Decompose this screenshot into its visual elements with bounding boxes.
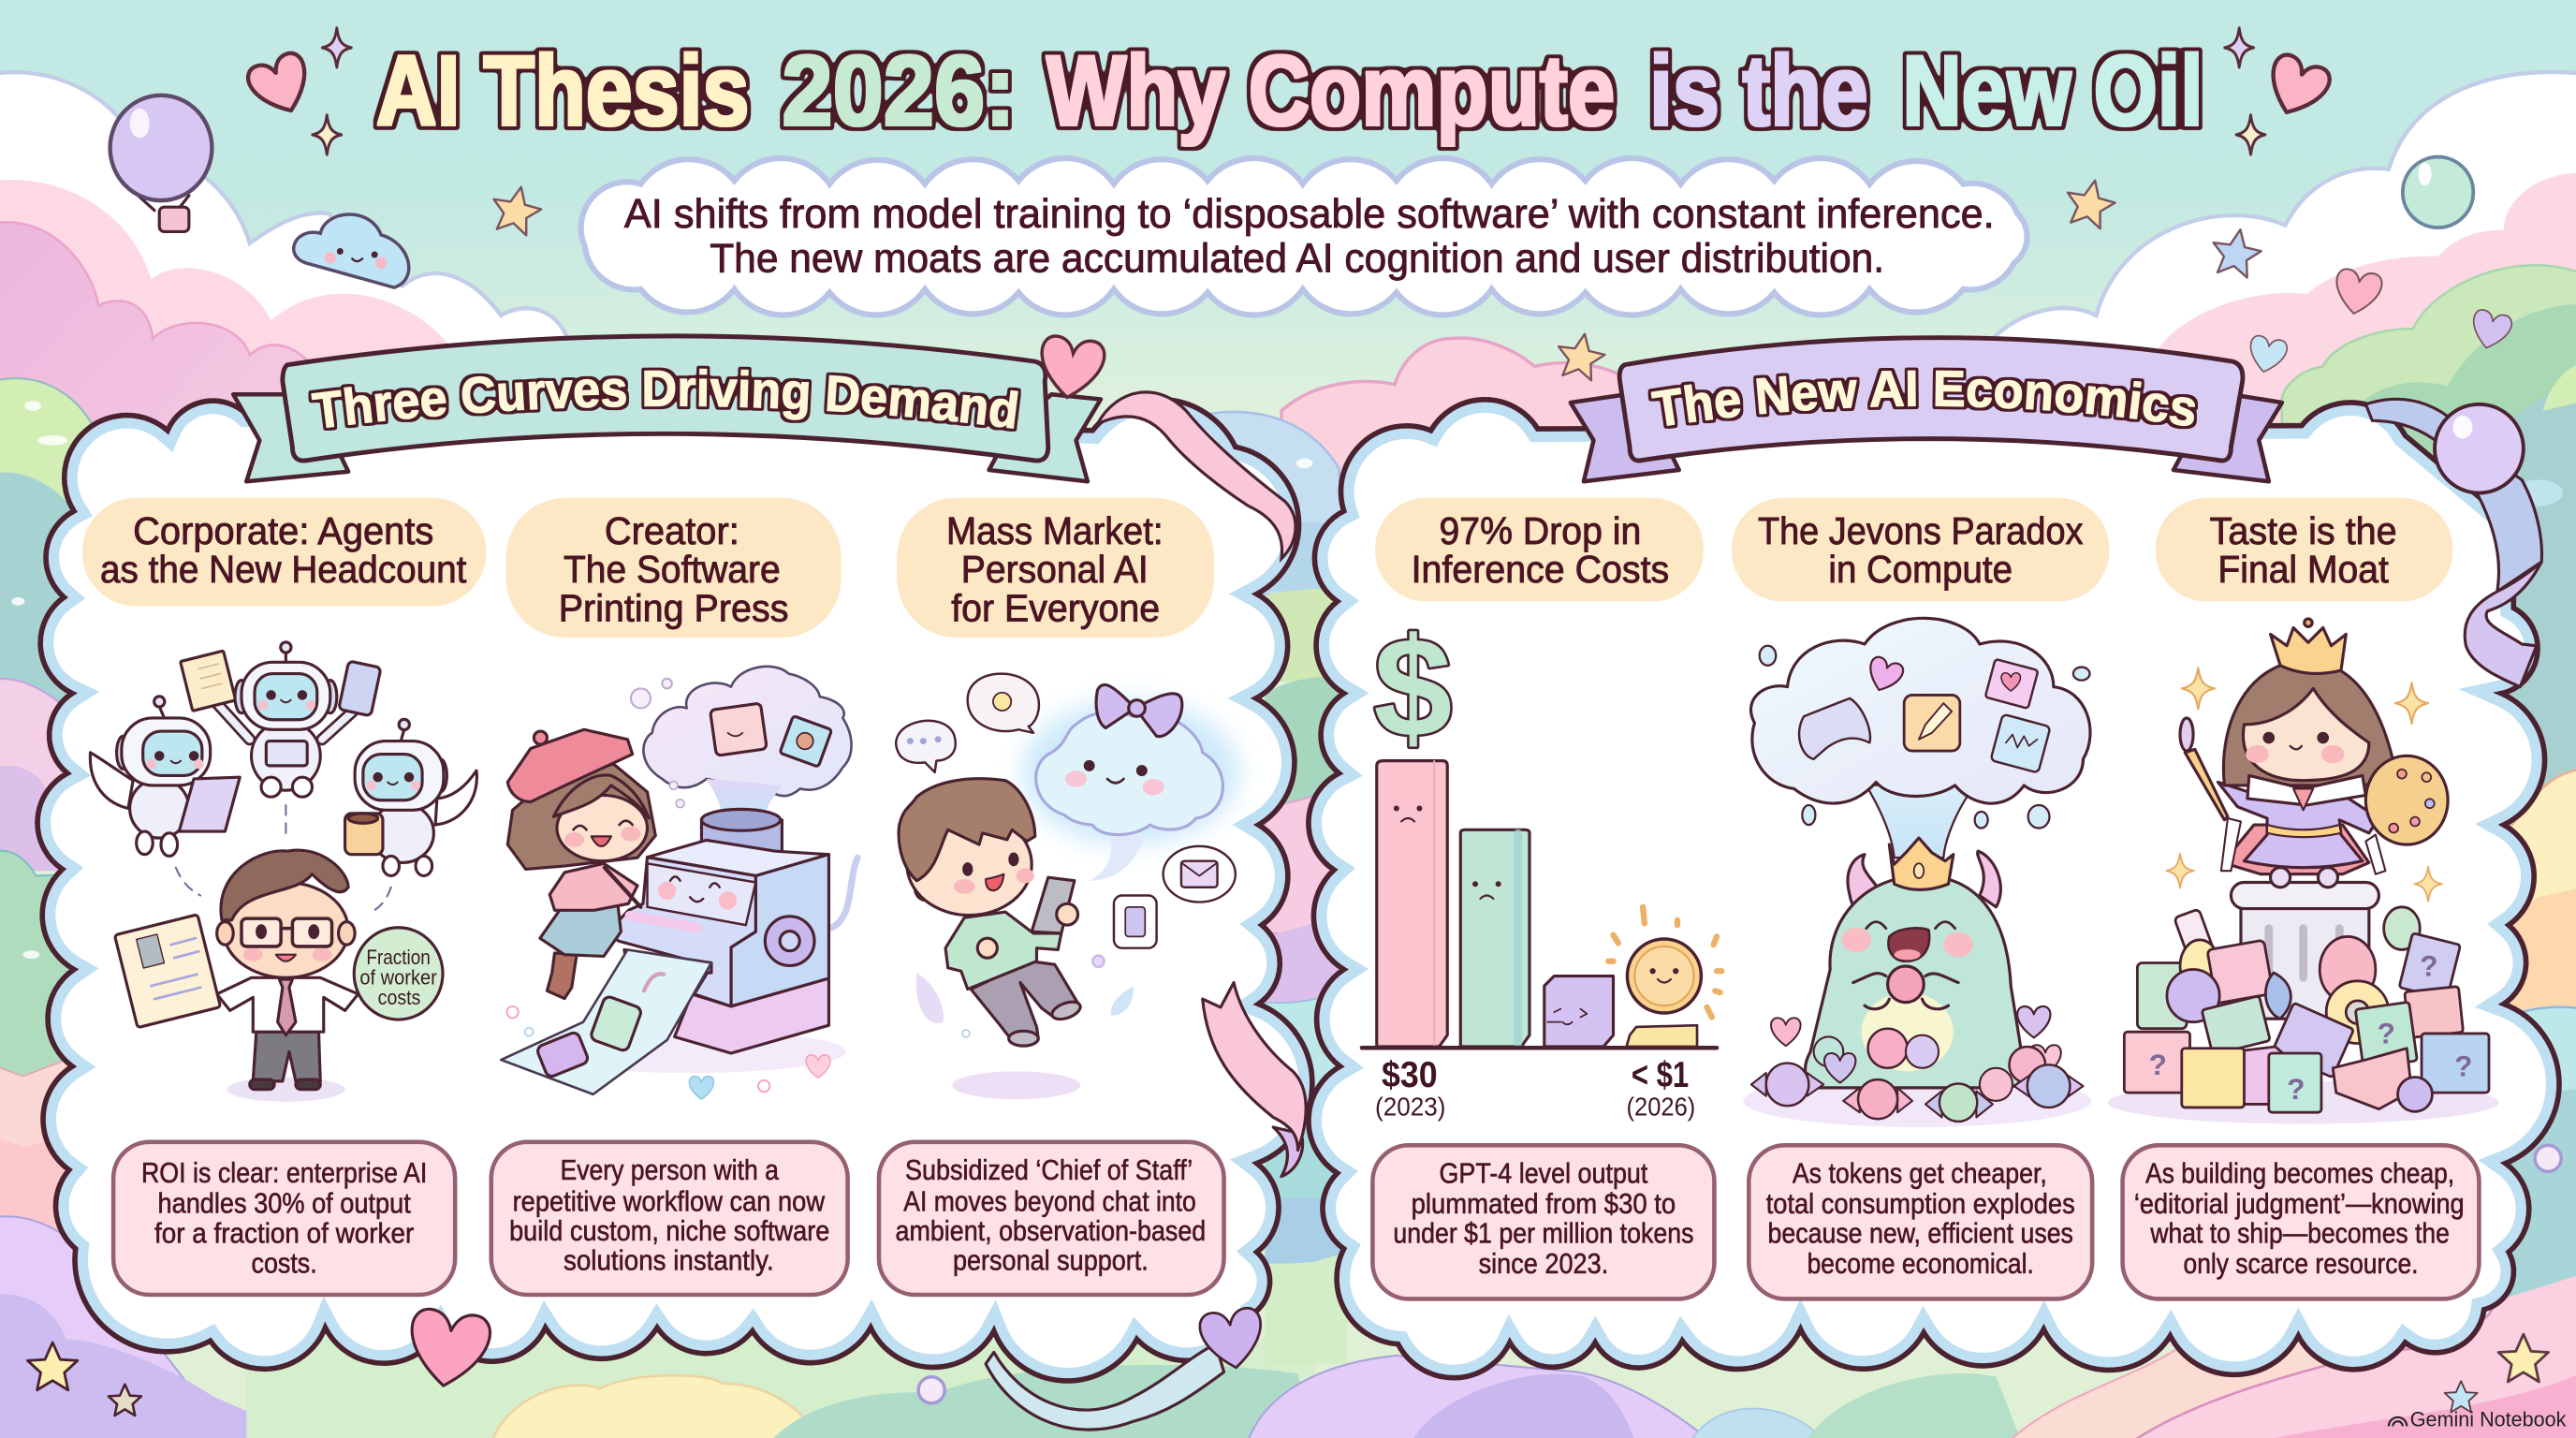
cape xyxy=(2223,825,2369,874)
bar: middle xyxy=(1460,829,1530,1047)
text box: Subsidized: AI moves beyond chat into xyxy=(903,1185,1196,1218)
pill: 97% Drop: 97% Drop in xyxy=(1439,509,1641,552)
illustration: princess on pedestal with blocks xyxy=(2108,619,2499,1123)
text box: tokens xyxy=(1749,1145,2092,1299)
pill bodies: left panel descriptions xyxy=(113,1142,1224,1295)
question marks: ? xyxy=(2287,1072,2305,1106)
text box: Subsidized: personal support. xyxy=(953,1244,1149,1277)
text box: GPT-4: under $1 per million tokens xyxy=(1393,1217,1694,1250)
icon: palette xyxy=(2365,756,2448,844)
text box: ROI xyxy=(113,1142,455,1295)
cloud: green left xyxy=(0,378,98,542)
monster xyxy=(1806,838,2024,1088)
question marks: ? xyxy=(2378,1016,2395,1049)
title xyxy=(376,34,2203,146)
text box: Subsidized xyxy=(879,1142,1224,1295)
text box: tokens: total consumption explodes xyxy=(1766,1187,2075,1220)
gap between panels xyxy=(1208,412,1347,594)
pill: Taste xyxy=(2156,498,2452,601)
heading banner: Three Curves Driving Demand: Three Curves Driving Demand xyxy=(308,365,1021,432)
text box: Subsidized: Subsidized ‘Chief of Staff’ xyxy=(905,1153,1193,1186)
text box: Every person xyxy=(491,1142,848,1295)
figure: princess xyxy=(2217,619,2397,888)
cloud: pink behind right banner xyxy=(1281,338,1627,526)
figure: manager xyxy=(114,850,359,1102)
icon: dollar sign: $ xyxy=(1373,608,1452,766)
cloud: right white xyxy=(1971,72,2576,542)
subtitle text xyxy=(624,191,1995,281)
icon: heart on banner xyxy=(1036,334,1106,402)
pill: Mass Market: Personal AI xyxy=(961,548,1149,591)
speech bubbles xyxy=(896,674,1236,1037)
ribbon: pink streamer xyxy=(1097,392,1295,559)
icons: floating stars, bubble and hearts xyxy=(488,157,2513,382)
subheads: right panel xyxy=(1375,498,2452,601)
text box: Every person: Every person with a xyxy=(560,1153,780,1186)
axis labels xyxy=(1375,1055,1695,1122)
subtitle text: AI shifts from model training to ‘disposable software’ with constant inference. xyxy=(624,191,1995,237)
droplets xyxy=(1760,646,2089,829)
text box: ROI: costs. xyxy=(252,1246,317,1279)
cloud: top-left white xyxy=(0,72,567,526)
ribbon: pink tail and bottom decorations xyxy=(27,983,1306,1430)
icon: kawaii cloud xyxy=(294,214,409,287)
title: Why Compute xyxy=(1046,34,1615,146)
illustration: creator and printing press xyxy=(501,667,857,1099)
text box: GPT-4: GPT-4 level output xyxy=(1439,1157,1648,1190)
pill: Mass Market xyxy=(897,498,1214,638)
cloud: pink left xyxy=(0,180,476,559)
pill: 97% Drop: Inference Costs xyxy=(1412,548,1669,591)
heading banner: Three Curves Driving Demand xyxy=(230,333,1106,483)
cloud: bottom-right pink xyxy=(2136,1232,2576,1438)
chart axis xyxy=(1362,1047,1717,1049)
cloud: bottom right xyxy=(1249,1356,1708,1438)
text box: Every person: build custom, niche software xyxy=(509,1214,829,1247)
ribbon: lavender streamer xyxy=(2365,399,2541,687)
robot: left with tablet xyxy=(90,697,240,856)
text box: Every person: repetitive workflow can now xyxy=(513,1185,826,1218)
question marks xyxy=(2149,949,2472,1106)
cloud: magenta left xyxy=(0,222,312,575)
question marks: ? xyxy=(2420,949,2438,983)
icon: lavender hot air balloon xyxy=(110,95,212,231)
text box: tokens: become economical. xyxy=(1808,1247,2034,1280)
panel: Three Curves Driving Demand xyxy=(37,392,1312,1381)
bar chart: inference cost drop xyxy=(1362,608,1721,1122)
dress xyxy=(2217,782,2378,868)
text box: GPT-4: plummated from $30 to xyxy=(1412,1187,1676,1220)
text box: GPT-4: since 2023. xyxy=(1479,1247,1608,1280)
question marks: ? xyxy=(2454,1049,2472,1083)
figure: creator girl xyxy=(507,729,655,999)
callout: fraction of worker costs xyxy=(354,928,443,1020)
heading banner: The New AI Economics: The New AI Economics xyxy=(1647,367,2198,429)
axis labels: < $1 xyxy=(1632,1055,1689,1095)
ai cloud xyxy=(1022,684,1238,881)
illustration: Jevons monster and cloud xyxy=(1743,618,2091,1127)
robot: top centre xyxy=(181,642,381,797)
subtitle text: The new moats are accumulated AI cognition and user distribution. xyxy=(710,235,1884,281)
icon: happy coin xyxy=(1608,907,1721,1017)
watermark: Gemini Notebook: Gemini Notebook xyxy=(2410,1407,2567,1431)
axis labels: (2023) xyxy=(1375,1093,1445,1122)
icons: bottom right stars and ring xyxy=(2445,1145,2561,1413)
text box: ROI: for a fraction of worker xyxy=(154,1217,414,1250)
illustration: robots and manager xyxy=(90,642,476,1102)
subheads: left panel xyxy=(82,498,1214,638)
candy pile xyxy=(1751,1006,2083,1122)
callout: fraction of worker costs: of worker xyxy=(359,965,437,989)
thought cloud xyxy=(1751,618,2090,803)
fountain xyxy=(1866,782,1978,858)
pill: Jevons Paradox: The Jevons Paradox xyxy=(1758,509,2083,552)
background highlights xyxy=(11,401,1312,959)
cloud: right green xyxy=(2282,265,2576,542)
text box: taste: what to ship—becomes the xyxy=(2150,1217,2450,1250)
robot: right with cup xyxy=(345,719,476,875)
callout: fraction of worker costs: costs xyxy=(378,986,420,1009)
pill: Jevons Paradox: in Compute xyxy=(1828,548,2012,591)
axis labels: $30 xyxy=(1382,1055,1438,1095)
block pile xyxy=(2124,907,2489,1112)
pill: Jevons Paradox xyxy=(1732,498,2110,601)
sparkle bits xyxy=(506,1006,830,1099)
pill: Mass Market: Mass Market: xyxy=(946,509,1164,552)
bar: 2023 xyxy=(1377,761,1447,1047)
panel: The New AI Economics xyxy=(1309,399,2559,1378)
cloud: right side bands xyxy=(2506,769,2576,920)
text boxes: right panel xyxy=(1372,1145,2479,1299)
crown xyxy=(2271,627,2346,673)
pedestal xyxy=(2231,882,2378,1019)
title: New Oil xyxy=(1902,34,2203,146)
axis labels: (2026) xyxy=(1627,1093,1695,1122)
pill: Creator: Creator: xyxy=(605,509,739,552)
pill: Taste: Final Moat xyxy=(2217,548,2389,591)
pill: Creator: The Software xyxy=(564,548,781,591)
bar: small xyxy=(1544,976,1614,1047)
icon: paintbrush xyxy=(2180,718,2228,820)
heading banner: The New AI Economics xyxy=(1569,335,2284,483)
question marks: ? xyxy=(2149,1048,2167,1081)
icon: title hearts and sparkles xyxy=(244,28,2334,154)
subtitle cloud xyxy=(581,158,2027,315)
cloud: left side bands xyxy=(0,473,79,707)
sparkles xyxy=(2166,668,2442,902)
text box: taste: only scarce resource. xyxy=(2184,1247,2419,1280)
paper strip xyxy=(501,949,711,1094)
figure: boy with phone xyxy=(899,779,1083,1046)
text box: ROI: ROI is clear: enterprise AI xyxy=(141,1156,427,1189)
text box: GPT-4 xyxy=(1372,1145,1714,1299)
title: AI Thesis xyxy=(376,34,749,146)
text box: tokens: As tokens get cheaper, xyxy=(1793,1157,2047,1190)
title: is the xyxy=(1649,34,1868,146)
text box: Subsidized: ambient, observation-based xyxy=(896,1214,1206,1247)
text box: Every person: solutions instantly. xyxy=(564,1244,774,1277)
icon: purple ball xyxy=(2435,404,2524,493)
pill: Corporate: as the New Headcount xyxy=(100,548,466,591)
icon: gold bar xyxy=(1627,1025,1697,1047)
illustration: personal AI cloud and boy xyxy=(896,674,1238,1099)
callout: fraction of worker costs: Fraction xyxy=(366,946,431,969)
printer machine xyxy=(608,809,857,1053)
title: 2026: xyxy=(782,34,1016,146)
text box: taste xyxy=(2123,1145,2479,1299)
cloud: bottom middle xyxy=(246,1339,1314,1438)
text box: taste: As building becomes cheap, xyxy=(2145,1157,2454,1190)
pill: Taste: Taste is the xyxy=(2210,509,2397,552)
pill: Corporate: Corporate: Agents xyxy=(133,509,433,552)
cloud: right pink xyxy=(2136,172,2576,542)
pill: 97% Drop xyxy=(1375,498,1704,601)
pill: Creator: Printing Press xyxy=(559,586,788,629)
pill: Mass Market: for Everyone xyxy=(951,586,1160,629)
text box: tokens: because new, efficient uses xyxy=(1767,1217,2073,1250)
text box: taste: ‘editorial judgment’—knowing xyxy=(2134,1187,2465,1220)
pill: Corporate xyxy=(82,498,487,607)
connector: dashed lines xyxy=(176,805,391,914)
pill: Creator xyxy=(506,498,842,638)
text box: ROI: handles 30% of output xyxy=(157,1186,411,1219)
cloud of generated apps xyxy=(631,667,852,822)
